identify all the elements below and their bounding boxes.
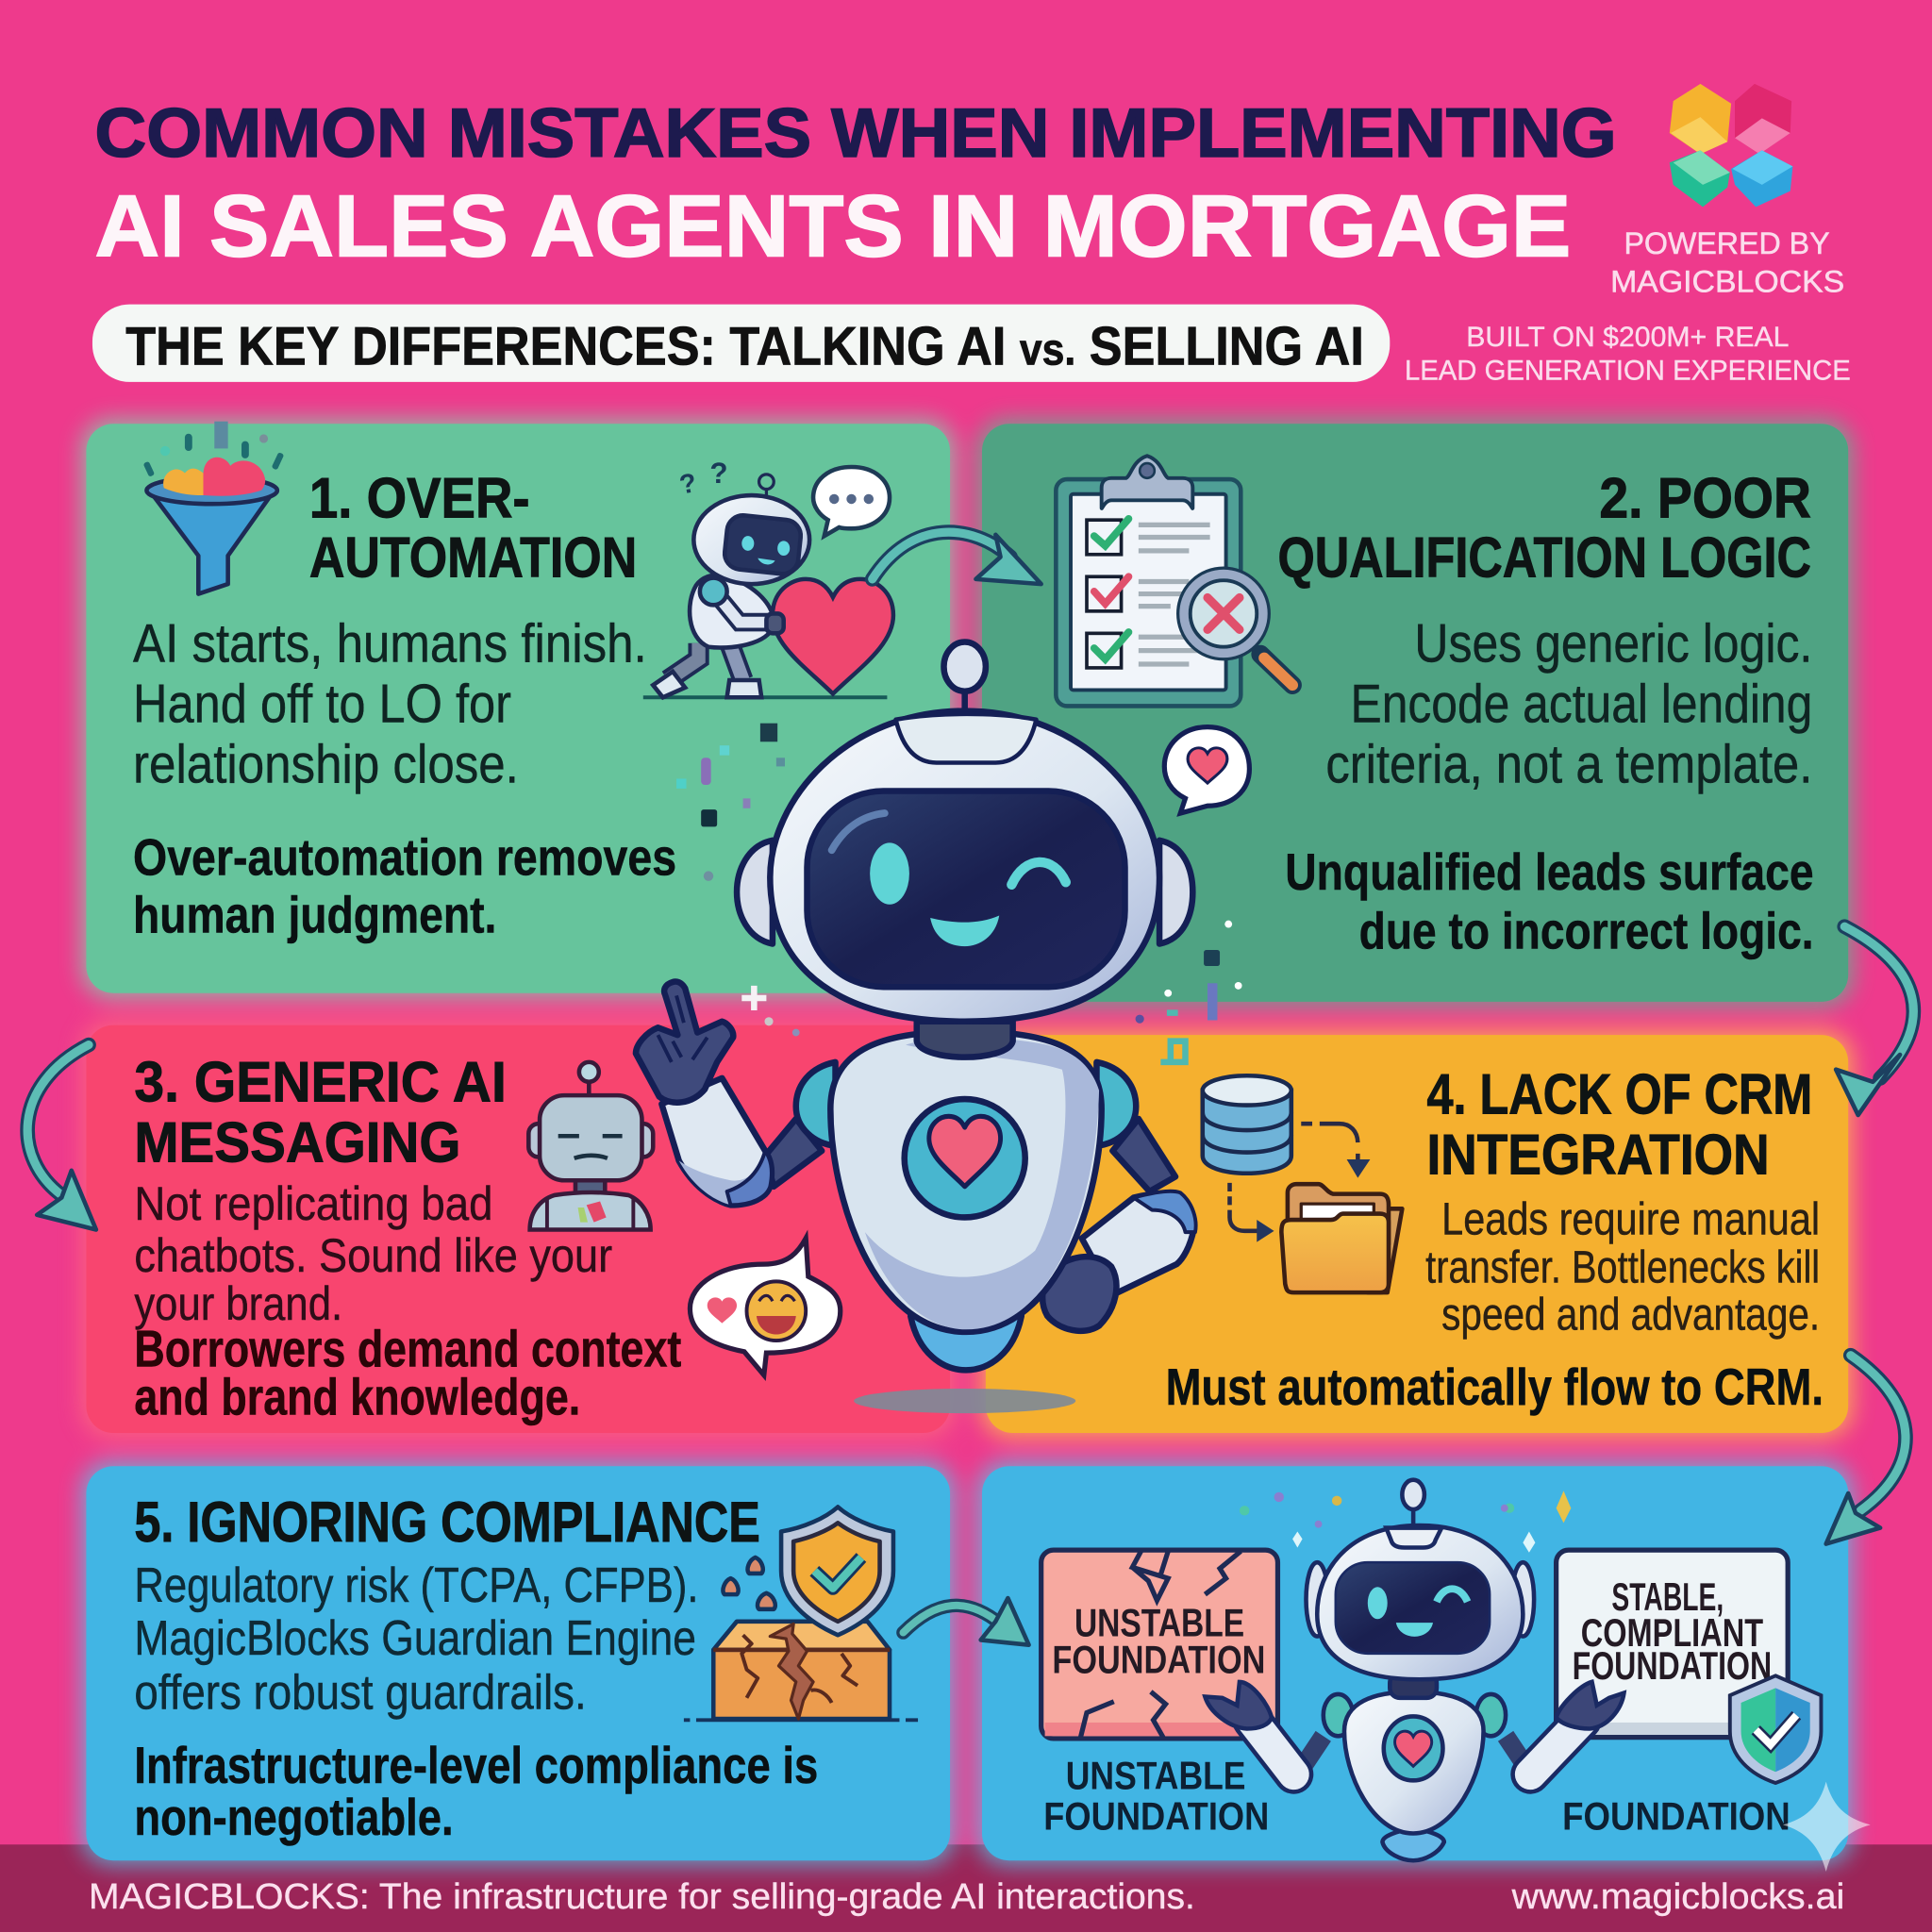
icon: speech bubble with dots [813,467,890,536]
robot chest emblem [905,1099,1025,1217]
callout 3: Borrowers demand context [134,1319,681,1377]
body 2 [1325,613,1812,794]
body 3: Not replicating bad [134,1177,492,1230]
callout 5: Infrastructure-level compliance is [134,1736,818,1794]
panel 5: ignoring compliance [86,1466,950,1860]
visor glare [832,813,885,850]
checklist lines [1139,525,1210,664]
experience note: BUILT ON $200M+ REAL [1466,322,1789,353]
footer band [0,1844,1932,1932]
arrow: panel 1 to panel 2 [873,532,1041,584]
arrow: panel 2 to panel 4 [1836,926,1913,1115]
robot pointing hand [636,982,733,1103]
icon: MagicBlocks logo [1670,84,1792,207]
icon: funnel with hearts [143,422,284,594]
body 2: criteria, not a template. [1325,734,1812,794]
ground shadow [854,1389,1075,1413]
floating pixel particles [676,724,1242,1062]
body 3: your brand. [134,1277,342,1330]
callout 1: human judgment. [133,886,496,944]
icon: magnifier with X [1178,568,1292,685]
panel 4: lack of CRM integration [986,1035,1848,1433]
robot head [770,711,1159,1022]
body 1 [133,613,647,794]
robot visor [808,791,1124,987]
mini robot legs [653,643,761,697]
panel 2: poor qualification logic [982,424,1848,1002]
heading 5: 5. IGNORING COMPLIANCE [134,1491,760,1554]
icon: heart speech bubble [1164,727,1249,813]
cracked box [713,1622,890,1719]
check marks [1094,519,1128,659]
caption: unstable [1043,1753,1269,1839]
robot shoulders [796,1062,1136,1146]
callout 2: Unqualified leads surface [1285,842,1814,901]
unstable block: FOUNDATION [1052,1638,1265,1682]
big heart [773,579,893,693]
callout 1: Over-automation removes [133,827,676,886]
body 1: Hand off to LO for [133,674,511,734]
icon: clipboard checklist [1056,456,1241,706]
mini robot body [690,575,774,648]
powered by label: POWERED BY [1624,225,1830,260]
question marks: ? [709,457,727,490]
heading 2 [1277,467,1811,589]
arrow: panel 4 to panel 6 [1826,1356,1906,1544]
callout 2 [1285,842,1814,960]
checklist boxes [1087,520,1122,668]
title: AI SALES AGENTS IN MORTGAGE [95,177,1571,275]
heading 3 [134,1051,507,1174]
ground line [643,696,887,699]
shield [781,1507,893,1635]
robot neck [917,1022,1013,1058]
title: COMMON MISTAKES WHEN IMPLEMENTING [95,95,1617,172]
powered by label: MAGICBLOCKS [1610,264,1844,299]
body 3: chatbots. Sound like your [134,1229,612,1282]
small robot [1205,1480,1624,1860]
unstable block [1041,1550,1277,1739]
robot antenna [943,641,986,717]
funnel particles [143,422,284,477]
footer tagline: MAGICBLOCKS: The infrastructure for selling-grade AI interactions. [89,1877,1195,1917]
heading 2: 2. POOR [1599,467,1811,530]
arrow: panel 3 side [27,1045,96,1230]
icon: orange shield and cracked foundation [684,1507,918,1720]
body 4 [1425,1194,1820,1340]
powered by label [1610,225,1844,299]
body 4: transfer. Bottlenecks kill [1425,1242,1820,1293]
panel 1: over-automation [86,424,950,993]
heading 4: 4. LACK OF CRM [1426,1063,1812,1126]
stable block: STABLE, [1611,1574,1724,1619]
panel 6: foundation comparison [982,1466,1848,1860]
body 4: Leads require manual [1441,1194,1820,1245]
callout 5 [134,1736,818,1846]
icon: folder [1281,1184,1402,1292]
subtitle pill: THE KEY DIFFERENCES: TALKING AI vs. SELLING AI [125,317,1364,377]
panel glows [81,419,1853,1865]
pebbles [723,1557,775,1609]
question marks: ? [677,468,699,501]
body 5 [134,1558,699,1721]
heading 4: INTEGRATION [1426,1124,1770,1187]
experience note: LEAD GENERATION EXPERIENCE [1405,355,1851,386]
robot ears [737,841,1192,943]
robot left arm [661,1078,822,1205]
mini robot arm [700,578,784,633]
body 1: relationship close. [133,734,519,794]
question marks [677,457,727,501]
caption: stable: FOUNDATION [1562,1794,1790,1839]
arrow: panel 5 to panel 6 [903,1598,1029,1645]
robot hatch [896,714,1036,762]
robot foot [910,1316,1022,1370]
panel 3: generic AI messaging [86,1025,950,1433]
caption: unstable: UNSTABLE [1066,1753,1245,1797]
icon: green shield [1730,1675,1821,1783]
robot wink [1011,862,1066,885]
heading 2: QUALIFICATION LOGIC [1277,525,1811,589]
dashed arrows [1230,1124,1370,1242]
footer url: www.magicblocks.ai [1511,1877,1844,1917]
body 5: offers robust guardrails. [134,1666,587,1721]
callout 3: and brand knowledge. [134,1367,580,1425]
robot eye [870,842,909,905]
body 4: speed and advantage. [1441,1289,1820,1340]
body 2: Encode actual lending [1351,674,1812,734]
heading 3: 3. GENERIC AI [134,1051,507,1114]
callout 1 [133,827,676,944]
body 2: Uses generic logic. [1414,613,1812,674]
icon: database [1203,1075,1291,1174]
heading 1: 1. OVER- [309,467,530,530]
callout 2: due to incorrect logic. [1359,902,1814,960]
small robot shoulders [1324,1694,1506,1736]
stable block: FOUNDATION [1573,1643,1772,1688]
heading 3: MESSAGING [134,1111,460,1174]
body shading [865,1038,1099,1329]
body 5: Regulatory risk (TCPA, CFPB). [134,1558,699,1613]
mini robot head [693,495,809,584]
main robot mascot [636,641,1196,1370]
stable block: COMPLIANT [1581,1610,1763,1655]
icon: emoji speech bubble [690,1239,841,1375]
small robot arms [1205,1682,1624,1774]
heading 1: AUTOMATION [309,525,637,589]
sparkle dots [1240,1491,1571,1553]
heading 4 [1426,1063,1812,1187]
heading 1 [309,467,637,589]
caption: unstable: FOUNDATION [1043,1794,1269,1839]
body 1: AI starts, humans finish. [133,613,647,674]
title [95,95,1617,275]
experience note [1405,322,1851,386]
callout 3 [134,1319,681,1425]
body 3 [134,1177,612,1330]
unstable block: UNSTABLE [1074,1601,1244,1645]
sparkle watermark [1783,1782,1871,1872]
callout 5: non-negotiable. [134,1788,454,1846]
icon: sad robot [528,1062,653,1230]
robot right arm [1042,1119,1196,1331]
body 5: MagicBlocks Guardian Engine [134,1611,696,1666]
robot smile [930,915,999,946]
ground line [684,1719,918,1722]
icon: robot pushing heart [643,457,893,697]
stable block [1557,1550,1788,1738]
robot body [830,1031,1102,1332]
